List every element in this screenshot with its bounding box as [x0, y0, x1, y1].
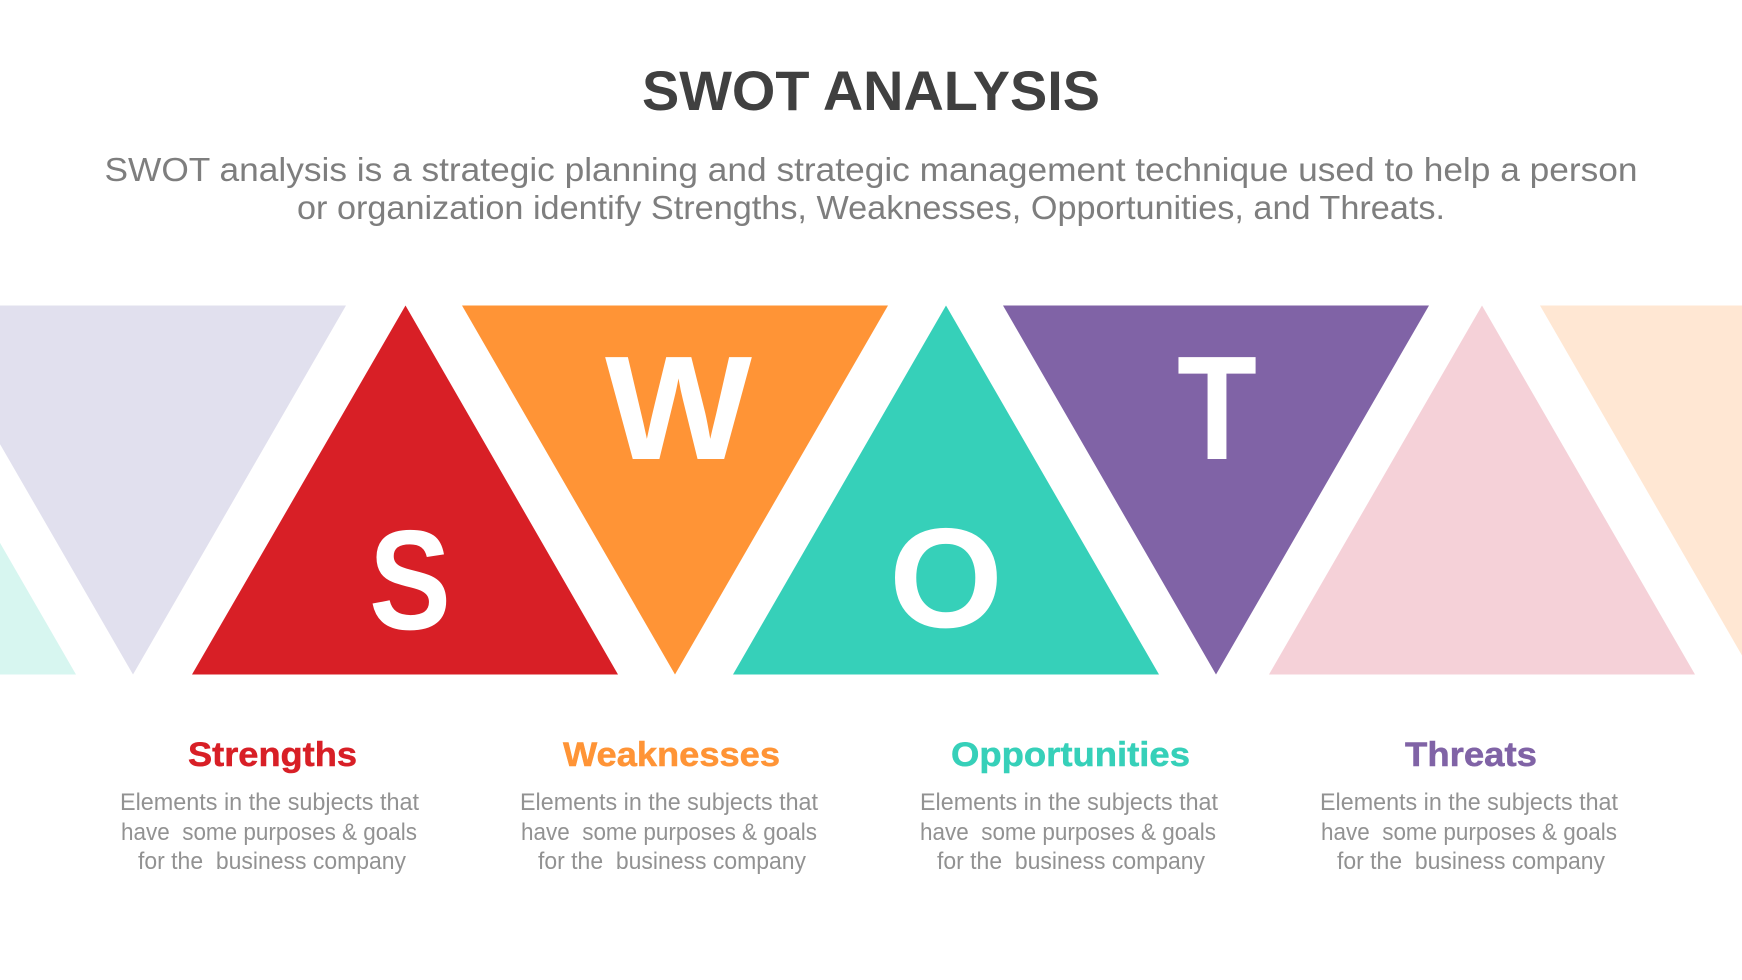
triangle: T threats: T: [1177, 326, 1257, 491]
column: threats: Elements in the subjects that: [1320, 789, 1618, 816]
column: opportunities: have some purposes & goals: [920, 819, 1216, 846]
subtitle text: [104, 151, 1638, 226]
column: opportunities: for the business company: [937, 848, 1205, 875]
column: weaknesses: have some purposes & goals: [521, 819, 817, 846]
triangle: faded peach right: [1540, 306, 1742, 674]
column: threats: [1320, 736, 1618, 875]
column: weaknesses: for the business company: [538, 848, 806, 875]
triangle: O opportunities: O: [889, 499, 1003, 658]
triangle: S strengths: S: [369, 501, 451, 660]
column: strengths: [120, 736, 419, 875]
triangle: faded pink: [1269, 306, 1695, 674]
column: strengths: for the business company: [138, 848, 406, 875]
title: SWOT ANALYSIS: [642, 59, 1100, 122]
triangle: T threats: [1003, 306, 1429, 674]
column: threats: for the business company: [1337, 848, 1605, 875]
subtitle text: SWOT analysis is a strategic planning and strategic management technique used to help a person: [104, 151, 1638, 188]
triangle: W weaknesses: W: [605, 326, 752, 491]
triangle: faded lavender: [0, 306, 346, 674]
triangle: faded teal left: [0, 306, 76, 674]
column: weaknesses: Weaknesses: [563, 736, 780, 774]
column: opportunities: Opportunities: [951, 736, 1190, 774]
triangle: O opportunities: [733, 306, 1159, 674]
column: threats: Threats: [1405, 736, 1537, 774]
column: threats: have some purposes & goals: [1321, 819, 1617, 846]
column: strengths: Strengths: [188, 736, 357, 774]
column: weaknesses: Elements in the subjects that: [520, 789, 818, 816]
column: weaknesses: [520, 736, 818, 875]
column: strengths: Elements in the subjects that: [120, 789, 419, 816]
subtitle text: or organization identify Strengths, Weaknesses, Opportunities, and Threats.: [297, 189, 1445, 226]
column: strengths: have some purposes & goals: [121, 819, 417, 846]
triangle: W weaknesses: [462, 306, 888, 674]
column: opportunities: Elements in the subjects that: [920, 789, 1218, 816]
triangle: S strengths: [192, 306, 618, 674]
column: opportunities: [920, 736, 1218, 875]
